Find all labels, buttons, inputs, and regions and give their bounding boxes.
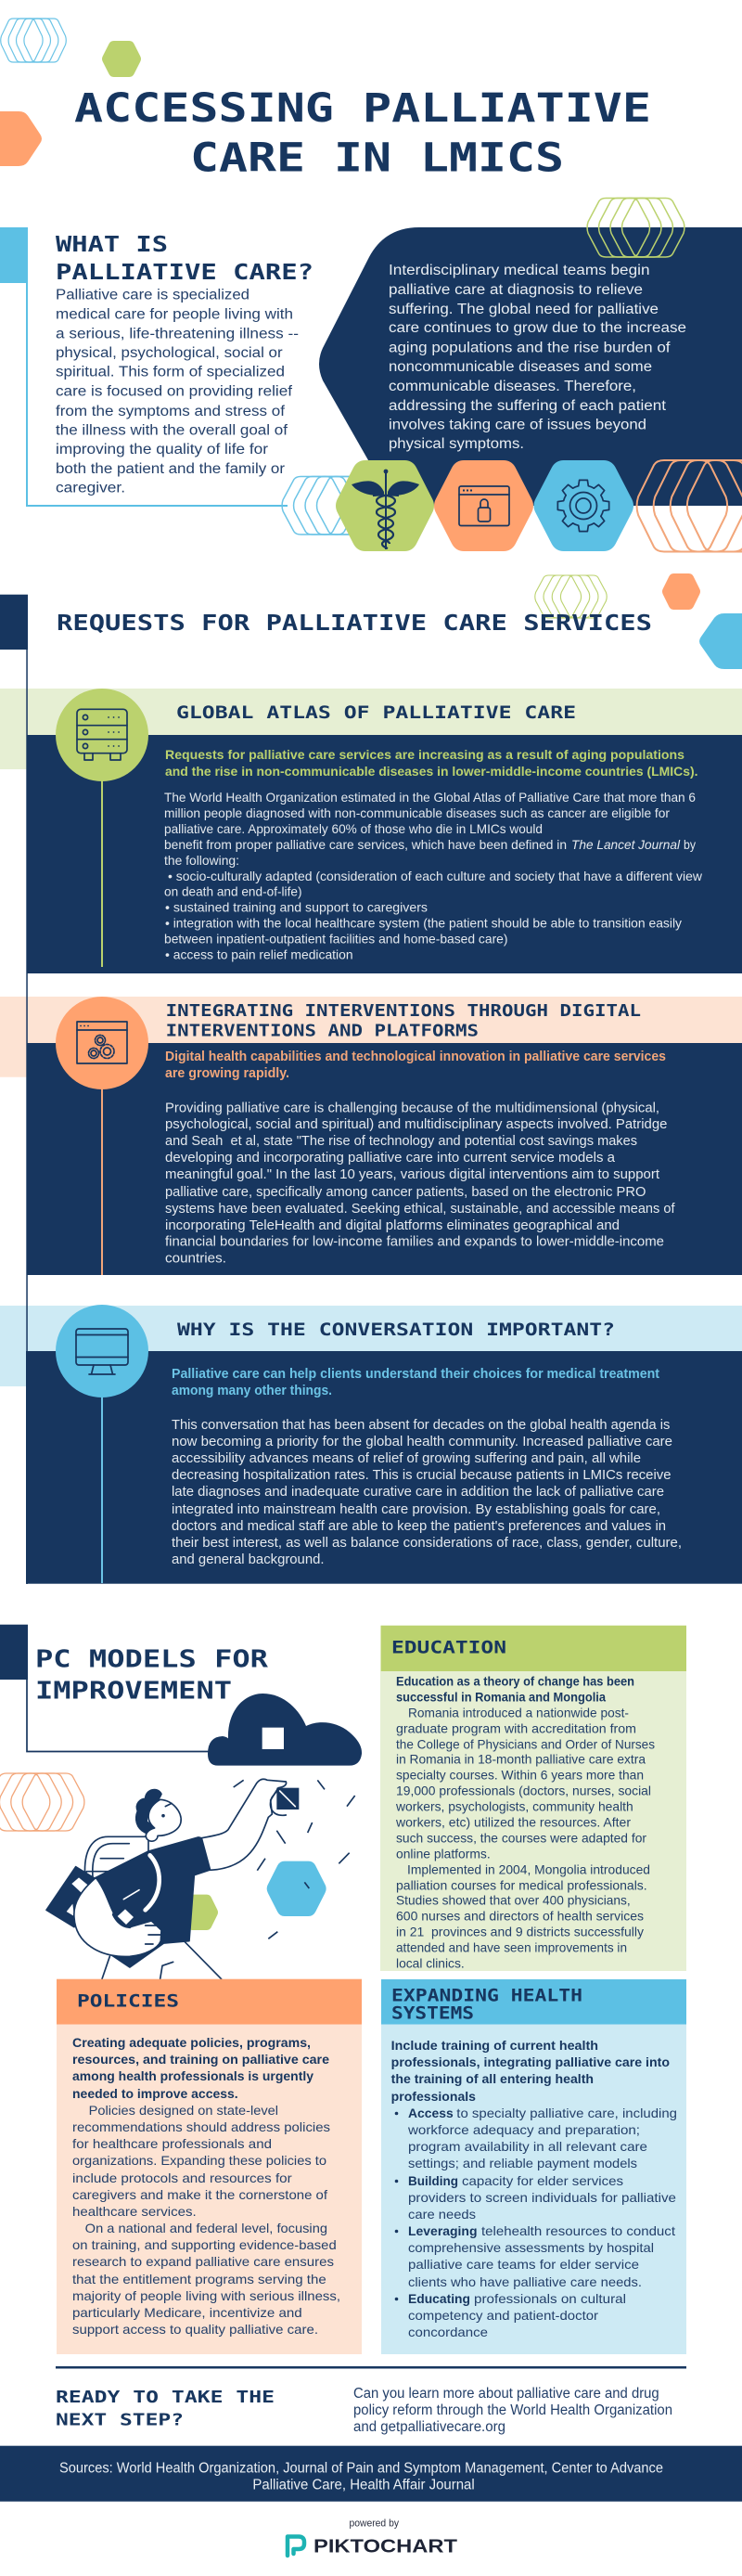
- text: specialty courses. Within 6 years more than: [396, 1769, 644, 1783]
- body text: million people diagnosed with non-communicable diseases such as cancer are eligible for: [164, 805, 670, 820]
- decorative hexagon: orange: [0, 111, 42, 166]
- person: [46, 1779, 299, 1979]
- paragraph: [389, 263, 686, 452]
- section heading: pc models: [35, 1646, 269, 1706]
- body text: developing and incorporating palliative care into current service models a: [165, 1151, 616, 1166]
- accent block: [0, 227, 28, 283]
- definition text: caregiver.: [56, 481, 125, 496]
- bullet list: clients who have palliative care needs.: [408, 2275, 642, 2289]
- heading: [166, 1001, 641, 1041]
- heading: [56, 231, 313, 285]
- text: for healthcare professionals and: [72, 2137, 272, 2151]
- bullet list: Educating: [408, 2292, 470, 2306]
- lead text: the training of all entering health: [391, 2072, 594, 2086]
- text: among health professionals is urgently: [72, 2069, 313, 2083]
- heading: [391, 1987, 582, 2024]
- text: healthcare services.: [72, 2205, 197, 2219]
- heading: EXPANDING HEALTH: [391, 1987, 582, 2006]
- outlined hexagon: green lower: [535, 575, 607, 618]
- text: On a national and federal level, focusing: [85, 2222, 327, 2235]
- call to action heading: READY TO TAKE THE: [56, 2388, 275, 2407]
- heading: SYSTEMS: [391, 2004, 474, 2024]
- call to action text: [353, 2386, 672, 2435]
- text: successful in Romania and Mongolia: [396, 1691, 606, 1705]
- body text: doctors and medical staff are able to keep the patient's preferences and values in: [172, 1519, 666, 1534]
- timeline line: [101, 770, 103, 967]
- text: attended and have seen improvements in: [396, 1941, 627, 1955]
- bullet list: to specialty palliative care, including: [456, 2106, 677, 2120]
- decorative hexagon: blue right: [699, 613, 742, 669]
- header: [57, 1979, 362, 2025]
- lead text: [165, 747, 697, 779]
- body text: and Seah et al, state "The rise of technology and potential cost savings makes: [165, 1134, 637, 1149]
- bracket line: [27, 1680, 213, 1752]
- body text: benefit from proper palliative care services, which have been defined in: [164, 837, 567, 852]
- paragraph: addressing the suffering of each patient: [389, 398, 667, 414]
- body text: by: [684, 837, 696, 852]
- title: ACCESSING PALLIATIVE: [74, 85, 651, 132]
- definition text: a serious, life-threatening illness --: [56, 327, 299, 341]
- bullet list: telehealth resources to conduct: [481, 2224, 675, 2238]
- outlined hexagon: green: [587, 199, 684, 257]
- bullet list: professionals on cultural: [474, 2292, 626, 2306]
- text: in Romania in 18-month palliative care extra: [396, 1753, 646, 1767]
- body text: This conversation that has been absent for decades on the global health agenda is: [172, 1418, 670, 1433]
- text: [72, 2036, 340, 2337]
- outlined hexagon: blue middle: [282, 477, 379, 535]
- bullet list: Building: [408, 2174, 458, 2188]
- green band: [0, 689, 742, 769]
- definition text: Palliative care is specialized: [56, 287, 249, 303]
- text: particularly Medicare, incentivize and: [72, 2306, 302, 2320]
- falling dashes: [234, 1780, 355, 1938]
- dark hexagonal background: [319, 227, 742, 506]
- paragraph: care continues to grow due to the increase: [389, 320, 686, 336]
- decorative hexagon: orange lower: [662, 573, 700, 610]
- text: the College of Physicians and Order of Nurses: [396, 1738, 655, 1752]
- definition text: from the symptoms and stress of: [56, 404, 286, 419]
- lead text: and the rise in non-communicable diseases in lower-middle-income countries (LMICs).: [165, 764, 697, 779]
- call to action text: policy reform through the World Health Organization: [353, 2402, 672, 2418]
- decorative hexagons: [181, 1861, 326, 1930]
- icon: gear on blue hexagon: [534, 460, 633, 551]
- body text: countries.: [165, 1252, 226, 1267]
- paragraph: communicable diseases. Therefore,: [389, 379, 636, 394]
- text: workers, psychologists, community health: [395, 1800, 633, 1814]
- sources band: Palliative Care, Health Affair Journal: [252, 2478, 475, 2493]
- bullet list: concordance: [408, 2325, 488, 2339]
- logo: piktochart: PIKTOCHART: [313, 2537, 457, 2557]
- powered by label: powered by: [349, 2518, 399, 2530]
- section accent block: [0, 1625, 28, 1680]
- timeline line: [101, 1076, 103, 1275]
- heading: INTEGRATING INTERVENTIONS THROUGH DIGITAL: [166, 1001, 641, 1021]
- heading: EDUCATION: [391, 1639, 506, 1658]
- bullet list: program availability in all relevant care: [408, 2140, 647, 2154]
- text: in 21 provinces and 9 districts successfully: [396, 1926, 644, 1939]
- text: workers, etc) utilized the resources. After: [395, 1816, 631, 1830]
- lead text: [172, 1367, 659, 1398]
- panel: expanding health systems: [381, 1979, 686, 2354]
- body text: their best interest, as well as balance considerations of race, class, gender, culture,: [172, 1536, 682, 1551]
- section accent block: [0, 595, 28, 650]
- body text: Providing palliative care is challenging because of the multidimensional (physical,: [165, 1101, 659, 1115]
- definition text: medical care for people living with: [56, 307, 293, 323]
- body text: between inpatient-outpatient facilities and home-based care): [164, 932, 508, 947]
- text: research to expand palliative care ensures: [72, 2255, 334, 2269]
- body text: on death and end-of-life): [164, 883, 302, 898]
- bullet list: palliative care teams for elder service: [408, 2258, 639, 2272]
- body text: psychological, social and spiritual) and multidisciplinary aspects involved. Patridge: [165, 1117, 667, 1132]
- icon: window lock on orange hexagon: [434, 460, 533, 551]
- sources band: Sources: World Health Organization, Journal of Pain and Symptom Management, Center to Advance: [59, 2461, 663, 2477]
- heading: INTERVENTIONS AND PLATFORMS: [166, 1022, 479, 1041]
- body text: integrated into mainstream health care provision. By establishing goals for care,: [172, 1502, 660, 1517]
- body text: decreasing hospitalization rates. This is crucial because patients in LMICs receive: [172, 1468, 671, 1483]
- panel: policies: [57, 1979, 362, 2354]
- panel: education: [380, 1626, 686, 1971]
- text: caregivers and make it the cornerstone of: [72, 2188, 327, 2202]
- body text: • sustained training and support to caregivers: [165, 900, 428, 915]
- header: [380, 1626, 686, 1671]
- text: online platforms.: [396, 1848, 491, 1861]
- text: 19,000 professionals (doctors, nurses, social: [396, 1784, 651, 1798]
- lead text: Requests for palliative care services are increasing as a result of aging populations: [165, 747, 684, 762]
- title: CARE IN LMICS: [190, 135, 564, 182]
- lead text: [165, 1050, 666, 1081]
- icon: window with gears: [56, 997, 148, 1089]
- text: Studies showed that over 400 physicians,: [396, 1894, 631, 1908]
- text: resources, and training on palliative care: [72, 2053, 329, 2067]
- blue band: [0, 1306, 742, 1386]
- peach band: [0, 997, 742, 1077]
- icon: caduceus on green hexagon: [336, 460, 434, 551]
- heading: GLOBAL ATLAS OF PALLIATIVE CARE: [176, 702, 576, 723]
- lead text: professionals: [391, 2090, 476, 2104]
- sources band: [0, 2446, 742, 2502]
- body text: [172, 1418, 682, 1567]
- panel: why is the conversation important: [0, 1305, 742, 1584]
- timeline line: [101, 1383, 103, 1583]
- illustration: person with cloud: [46, 1694, 362, 1979]
- panel: global atlas: [0, 689, 742, 973]
- text: Implemented in 2004, Mongolia introduced: [407, 1863, 650, 1877]
- dark body: [27, 1043, 742, 1275]
- outlined hexagon: orange left: [0, 1773, 84, 1831]
- cloud: [208, 1694, 362, 1766]
- body background: [381, 2025, 686, 2354]
- body text: [164, 790, 703, 961]
- lead text: [391, 2039, 670, 2104]
- body text: financial boundaries for low-income families and expands to lower-middle-income: [165, 1235, 664, 1250]
- definition text: [56, 287, 299, 496]
- text: include protocols and resources for: [72, 2171, 292, 2185]
- section heading: pc models: IMPROVEMENT: [35, 1678, 232, 1706]
- text: 600 nurses and directors of health services: [396, 1910, 644, 1924]
- definition text: care is focused on providing relief: [56, 384, 293, 399]
- dark body: [26, 1351, 742, 1584]
- panel: what is palliative care: [0, 227, 313, 506]
- dark body: [27, 735, 742, 973]
- heading: PALLIATIVE CARE?: [56, 259, 313, 285]
- text: majority of people living with serious illness,: [72, 2289, 340, 2303]
- icon: monitor: [56, 1305, 148, 1397]
- icon: server: [56, 689, 148, 781]
- text: local clinics.: [396, 1957, 465, 1971]
- text: graduate program with accreditation from: [396, 1722, 636, 1736]
- section heading: pc models: PC MODELS FOR: [35, 1646, 269, 1674]
- lead text: are growing rapidly.: [165, 1066, 289, 1081]
- definition text: physical, psychological, social or: [56, 345, 283, 361]
- heading: WHAT IS: [56, 231, 168, 257]
- decorative hexagon: green: [102, 41, 141, 77]
- lead text: Digital health capabilities and technological innovation in palliative care services: [165, 1050, 666, 1064]
- section heading: requests: REQUESTS FOR PALLIATIVE CARE SERVICES: [57, 610, 652, 636]
- definition text: spiritual. This form of specialized: [56, 365, 285, 380]
- bullet list: competency and patient-doctor: [408, 2309, 599, 2323]
- body text: palliative care. Approximately 60% of those who die in LMICs would: [164, 821, 543, 836]
- panel: interdisciplinary teams: [319, 199, 742, 506]
- call to action text: Can you learn more about palliative care and drug: [353, 2386, 659, 2402]
- heading: POLICIES: [77, 1992, 179, 2012]
- body background: [380, 1671, 686, 1971]
- body text: • integration with the local healthcare system (the patient should be able to transition easily: [165, 915, 682, 930]
- text: on training, and supporting evidence-based: [72, 2238, 337, 2252]
- body text: [165, 1101, 675, 1267]
- bullet list: capacity for elder services: [462, 2174, 623, 2188]
- text: recommendations should address policies: [72, 2120, 330, 2134]
- panel: integrating digital interventions: [0, 997, 742, 1275]
- text: Education as a theory of change has been: [396, 1675, 634, 1689]
- bullet list: [395, 2106, 677, 2339]
- body text: systems have been evaluated. Seeking ethical, sustainable, and accessible means of: [165, 1202, 675, 1217]
- paragraph: involves taking care of issues beyond: [389, 417, 646, 432]
- bullet list: providers to screen individuals for palliative: [408, 2191, 676, 2205]
- heading: WHY IS THE CONVERSATION IMPORTANT?: [177, 1320, 615, 1340]
- header: [381, 1979, 686, 2025]
- bullet list: comprehensive assessments by hospital: [408, 2241, 654, 2255]
- text: organizations. Expanding these policies to: [72, 2154, 326, 2168]
- bullet list: workforce adequacy and preparation;: [407, 2123, 640, 2137]
- body text: now becoming a priority for the global health community. Increased palliative care: [172, 1435, 672, 1449]
- bullet list: Access: [408, 2106, 454, 2120]
- definition text: both the patient and the family or: [56, 461, 285, 477]
- body text: and general background.: [172, 1552, 325, 1567]
- paragraph: noncommunicable diseases and some: [389, 359, 652, 375]
- definition text: improving the quality of life for: [56, 442, 268, 457]
- paragraph: aging populations and the rise burden of: [389, 341, 671, 356]
- text: Romania introduced a nationwide post-: [408, 1707, 629, 1720]
- body text: the following:: [164, 853, 239, 868]
- text: [395, 1675, 655, 1971]
- body text: The World Health Organization estimated in the Global Atlas of Palliative Care that more than 6: [164, 790, 696, 805]
- bullet list: Leveraging: [408, 2224, 477, 2238]
- text: support access to quality palliative care.: [72, 2323, 318, 2337]
- body text: incorporating TeleHealth and digital platforms eliminates geographical and: [165, 1218, 620, 1233]
- text: needed to improve access.: [72, 2087, 238, 2101]
- paragraph: Interdisciplinary medical teams begin: [389, 263, 649, 278]
- body text: palliative care, specifically among cancer patients, based on the electronic PRO: [165, 1185, 646, 1200]
- call to action text: and getpalliativecare.org: [353, 2419, 505, 2435]
- text: Creating adequate policies, programs,: [72, 2036, 311, 2050]
- text: such success, the courses were adapted for: [396, 1832, 646, 1846]
- decorative outlined hexagon: top left blue: [1, 19, 66, 62]
- paragraph: physical symptoms.: [389, 436, 524, 452]
- bracket line: [27, 282, 288, 506]
- body text: The Lancet Journal: [571, 837, 681, 852]
- lead text: professionals, integrating palliative care into: [391, 2055, 670, 2069]
- title: [74, 85, 651, 182]
- section vertical rule: [26, 650, 28, 1584]
- outlined hexagon: orange right: [637, 460, 742, 551]
- body background: [57, 2025, 362, 2354]
- body text: • access to pain relief medication: [165, 947, 353, 961]
- text: Policies designed on state-level: [89, 2104, 278, 2118]
- text: that the entitlement programs serving the: [72, 2273, 326, 2286]
- call to action heading: NEXT STEP?: [56, 2411, 184, 2430]
- body text: meaningful goal." In the last 10 years, various digital interventions aim to support: [165, 1167, 659, 1182]
- bullet list: settings; and reliable payment models: [408, 2157, 637, 2170]
- text: palliation courses for medical professionals.: [396, 1879, 647, 1893]
- definition text: the illness with the overall goal of: [56, 423, 288, 439]
- rule: [56, 2366, 686, 2368]
- lead text: Palliative care can help clients understand their choices for medical treatment: [172, 1367, 659, 1382]
- bullet list: care needs: [408, 2208, 476, 2222]
- lead text: among many other things.: [172, 1384, 332, 1398]
- lead text: Include training of current health: [391, 2039, 598, 2053]
- paragraph: suffering. The global need for palliative: [389, 302, 659, 317]
- body text: late diagnoses and inadequate curative care in addition the lack of palliative care: [172, 1485, 664, 1500]
- body text: • socio-culturally adapted (consideration of each culture and society that have a different view: [168, 869, 703, 883]
- paragraph: palliative care at diagnosis to relieve: [389, 282, 643, 298]
- body text: accessibility advances means of relief of growing suffering and pain, all while: [172, 1451, 641, 1466]
- call to action heading: [56, 2388, 275, 2430]
